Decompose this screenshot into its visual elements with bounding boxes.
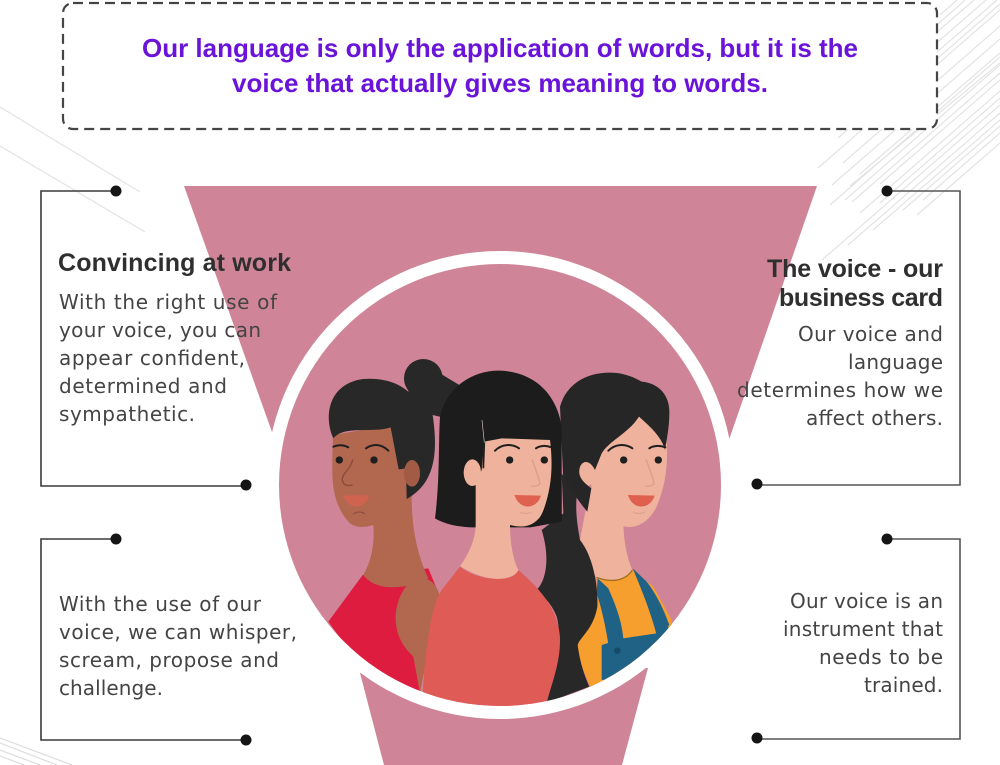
woman centre	[423, 371, 562, 710]
body text: instrument: instrument that	[783, 617, 943, 641]
heading: convincing at work: Convincing at work	[58, 249, 291, 277]
body text: business card: affect others.	[806, 406, 943, 430]
heading: the voice: The voice - our	[767, 255, 943, 283]
woman right	[537, 373, 672, 703]
body text: instrument: trained.	[864, 673, 943, 697]
quote text: voice that actually gives meaning to words.	[232, 68, 768, 98]
panel: instrument	[752, 534, 960, 744]
heading: the voice	[767, 255, 943, 312]
body text: business card: language	[848, 350, 943, 374]
illustration: three women	[328, 359, 672, 710]
panel: business card	[737, 186, 960, 490]
body text: convincing: determined and	[59, 374, 227, 398]
pink funnel top	[184, 186, 817, 460]
body text: instrument	[783, 589, 943, 697]
quote text	[142, 33, 858, 98]
heading: the voice: business card	[779, 284, 943, 312]
quote text: Our language is only the application of words, but it is the	[142, 33, 858, 63]
body text: business card: determines how we	[737, 378, 943, 402]
body text: convincing: With the right use of	[59, 290, 278, 314]
bracket bottom left	[41, 534, 252, 746]
quote box	[63, 3, 937, 129]
white ring circle	[266, 251, 734, 719]
panel: whisper	[41, 534, 297, 746]
body text: business card	[737, 322, 943, 430]
bracket top right	[752, 186, 960, 490]
body text: convincing: your voice, you can	[59, 318, 261, 342]
body text: convincing	[59, 290, 278, 426]
body text: whisper	[59, 592, 297, 700]
woman left	[328, 359, 459, 693]
body text: convincing: appear confident,	[59, 346, 245, 370]
pink funnel bottom	[360, 668, 648, 765]
body text: whisper: With the use of our	[59, 592, 262, 616]
body text: instrument: needs to be	[819, 645, 943, 669]
panel: convincing at work	[41, 186, 291, 490]
body text: whisper: challenge.	[59, 676, 163, 700]
body text: whisper: voice, we can whisper,	[59, 620, 297, 644]
body text: convincing: sympathetic.	[59, 402, 195, 426]
body text: whisper: scream, propose and	[59, 648, 279, 672]
pink circle	[279, 264, 721, 706]
body text: instrument: Our voice is an	[790, 589, 943, 613]
bracket top left	[41, 186, 252, 490]
body text: business card: Our voice and	[798, 322, 943, 346]
bracket bottom right	[752, 534, 960, 744]
